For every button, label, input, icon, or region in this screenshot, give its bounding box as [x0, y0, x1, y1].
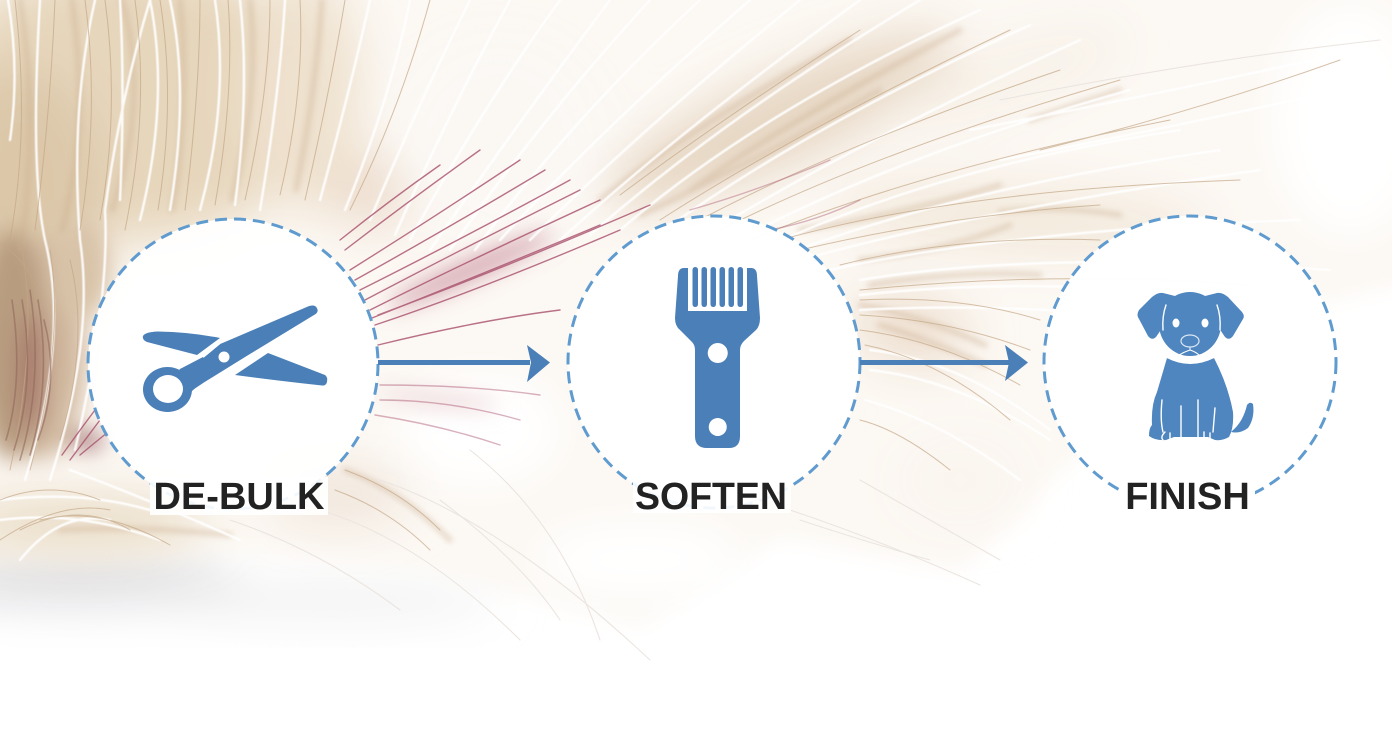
icon: scissors — [143, 304, 327, 412]
icon: dog — [1138, 292, 1253, 440]
icon: comb — [675, 267, 760, 448]
fur strands: fine tan — [0, 0, 1340, 550]
fur strands: soft tan streaks — [20, 0, 1120, 540]
arrow: soften to finish — [860, 345, 1028, 381]
label: DE-BULK: DE-BULK — [154, 476, 325, 518]
step 3: finish — [1044, 216, 1336, 518]
step 1: de-bulk — [88, 219, 378, 518]
circle: soften — [568, 216, 860, 508]
circle: de-bulk — [88, 219, 378, 509]
label: SOFTEN: SOFTEN — [635, 476, 787, 518]
step 2: soften — [568, 216, 860, 518]
arrow: de-bulk to soften — [378, 345, 550, 382]
fur strands: white highlights — [0, 0, 1360, 560]
shadow beneath fur — [0, 558, 500, 618]
fur strands: wine red roots — [62, 150, 860, 460]
fur strands: warm brown left edge — [6, 290, 51, 460]
label: FINISH: FINISH — [1125, 476, 1250, 518]
fur strands: faint lower tips — [230, 40, 1380, 660]
circle: finish — [1044, 216, 1336, 508]
